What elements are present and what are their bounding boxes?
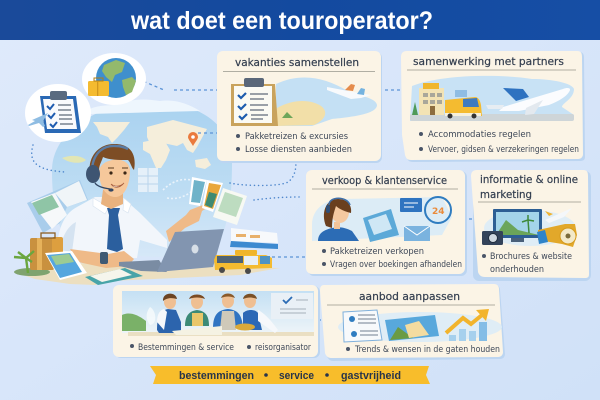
bullets: Bestemmingen & service bbox=[138, 343, 234, 353]
booklet on desk bbox=[85, 268, 143, 285]
team members bbox=[157, 294, 278, 333]
heading: samenwerking met partners bbox=[413, 56, 564, 68]
icon: globe with suitcase bbox=[82, 53, 146, 105]
heading: marketing bbox=[480, 189, 532, 201]
heading bbox=[480, 174, 578, 201]
icon: map pin bbox=[188, 132, 198, 146]
bullets: Vervoer, gidsen & verzekeringen regelen bbox=[428, 145, 579, 155]
bullets: Brochures & website bbox=[490, 252, 572, 262]
panel: samenwerking met partners bbox=[401, 51, 585, 162]
panel: aanbod aanpassen bbox=[320, 284, 505, 361]
scene: hotel, bus, plane bbox=[410, 76, 574, 121]
bullets: Losse diensten aanbieden bbox=[245, 145, 352, 155]
brochure on desk bbox=[45, 251, 87, 280]
title: wat doet een touroperator? bbox=[130, 7, 433, 35]
scene: agent, mail, 24h: 24 bbox=[432, 207, 445, 217]
panel: vakanties samenstellen bbox=[217, 51, 382, 163]
left brochure bbox=[27, 180, 88, 233]
bullets: Pakketreizen verkopen bbox=[330, 247, 424, 257]
heading: verkoop & klantenservice bbox=[322, 175, 447, 187]
bullets: Pakketreizen & excursies bbox=[245, 132, 349, 142]
laptop bbox=[119, 229, 224, 272]
beach scene bbox=[276, 77, 377, 126]
illustration: operator at desk bbox=[14, 144, 280, 285]
banner: kernwaarden: service bbox=[279, 370, 314, 382]
bullets: onderhouden bbox=[490, 265, 544, 275]
bullets bbox=[482, 252, 572, 275]
connector lines bbox=[32, 79, 481, 320]
bullets bbox=[236, 132, 352, 155]
banner: kernwaarden: bestemmingen bbox=[179, 370, 254, 382]
panel: team bestemmingen bbox=[113, 285, 320, 358]
head bbox=[86, 144, 135, 209]
heading: aanbod aanpassen bbox=[359, 291, 460, 303]
banner: kernwaarden: gastvrijheid bbox=[341, 370, 401, 382]
scene: brochure, photo, chart bbox=[338, 309, 502, 342]
heading: informatie & online bbox=[480, 174, 578, 186]
scene: team at table bbox=[122, 291, 314, 336]
bullets bbox=[130, 343, 311, 353]
bullets: Accommodaties regelen bbox=[428, 130, 531, 140]
scene: monitor, camera, megaphone bbox=[482, 208, 577, 247]
icon: clipboard with plane bbox=[25, 84, 91, 142]
world map background bbox=[52, 99, 232, 257]
suitcase bbox=[30, 233, 63, 270]
photos in hand bbox=[189, 177, 247, 225]
tie bbox=[107, 208, 123, 252]
panel: verkoop & klantenservice bbox=[306, 170, 467, 276]
desk bbox=[15, 263, 280, 285]
shirt bbox=[57, 197, 167, 260]
scene: agent, mail, 24h bbox=[312, 197, 452, 242]
bullets bbox=[322, 247, 462, 270]
bullets bbox=[419, 130, 579, 155]
heading: vakanties samenstellen bbox=[235, 57, 359, 69]
clipboard bbox=[231, 78, 278, 126]
arms bbox=[70, 249, 134, 268]
banner: kernwaarden bbox=[150, 366, 430, 384]
icon: palm bbox=[14, 251, 34, 273]
brochure stack bbox=[230, 228, 278, 249]
header banner bbox=[0, 0, 600, 40]
bullets: reisorganisator bbox=[255, 343, 311, 353]
bullet: Trends & wensen in de gaten houden bbox=[354, 345, 500, 355]
bus bbox=[214, 250, 272, 274]
bullets: Vragen over boekingen afhandelen bbox=[330, 260, 462, 270]
panel: informatie & online marketing bbox=[471, 170, 591, 281]
